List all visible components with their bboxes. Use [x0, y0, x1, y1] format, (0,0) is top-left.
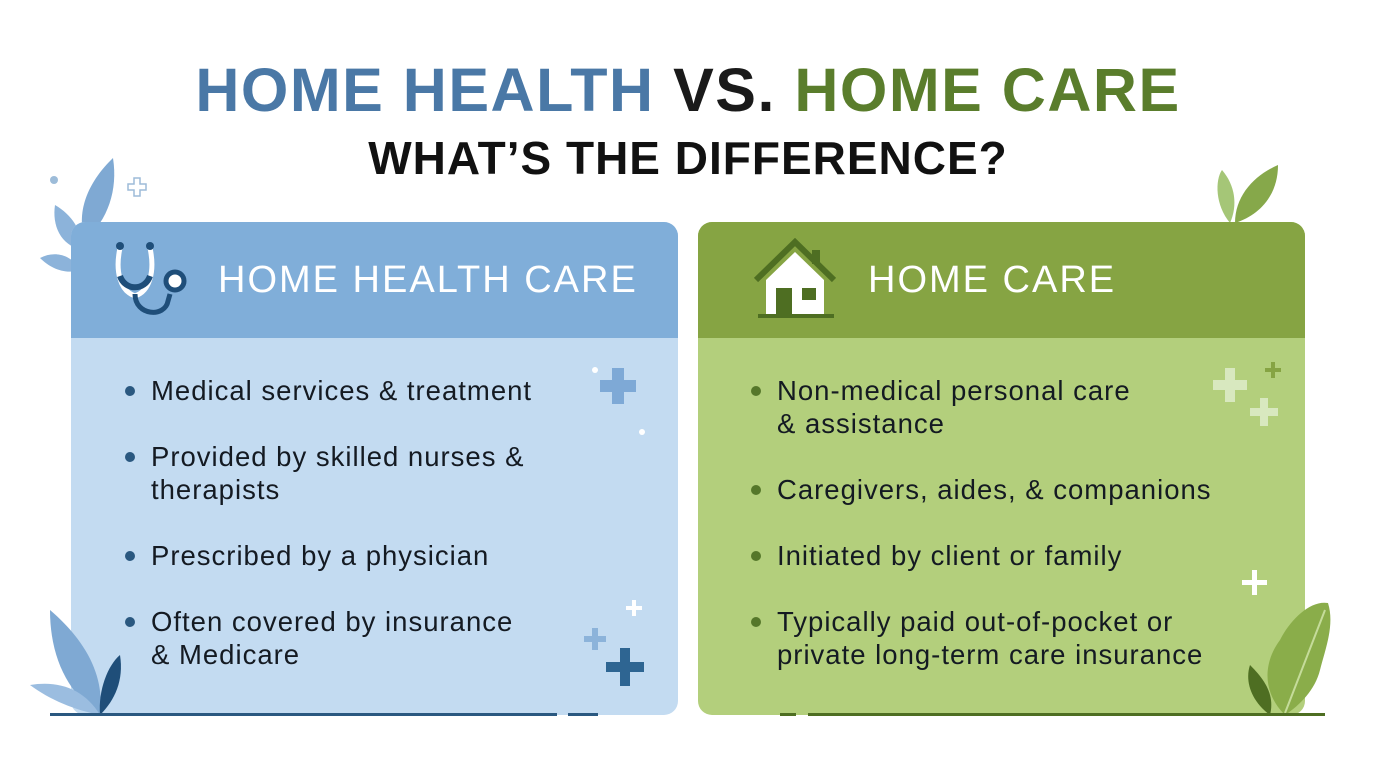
item 2 [125, 441, 524, 505]
item 4: Typically paid out-of-pocket or [777, 606, 1173, 637]
icon: stethoscope [116, 242, 186, 315]
item 3: Prescribed by a physician [151, 540, 489, 571]
heading: home health care: HOME HEALTH CARE [218, 259, 638, 301]
decoration: crosses left panel [584, 367, 645, 686]
decoration: crosses right panel [1213, 362, 1281, 595]
item 2: Provided by skilled nurses & [151, 441, 524, 472]
subtitle: WHAT’S THE DIFFERENCE? [368, 132, 1008, 184]
item 4: & Medicare [151, 639, 300, 670]
decoration: bottom-left leaves [30, 610, 121, 713]
item 1: Medical services & treatment [151, 375, 532, 406]
item 4: Often covered by insurance [151, 606, 513, 637]
panel: home care [698, 222, 1305, 715]
baseline right [780, 713, 796, 716]
item 1 [751, 375, 1131, 439]
item 3: Initiated by client or family [777, 540, 1122, 571]
item 4 [751, 606, 1203, 670]
list: home care [751, 375, 1212, 670]
icon: house [754, 238, 836, 318]
item 1: Non-medical personal care [777, 375, 1131, 406]
item 4: private long-term care insurance [777, 639, 1203, 670]
title: HOME HEALTH VS. HOME CARE [195, 56, 1181, 124]
list: home health [125, 375, 532, 670]
decoration: bottom-right leaf [1248, 602, 1330, 713]
item 2: Caregivers, aides, & companions [777, 474, 1212, 505]
heading: home care: HOME CARE [868, 259, 1116, 301]
baseline left [50, 713, 557, 716]
item 4 [125, 606, 513, 670]
item 2: therapists [151, 474, 280, 505]
header band [71, 222, 678, 338]
decoration: top-right leaves [1218, 165, 1278, 222]
item 1: & assistance [777, 408, 945, 439]
decoration: left top leaves [40, 158, 147, 272]
panel: home health care [71, 222, 678, 715]
header band [698, 222, 1305, 338]
